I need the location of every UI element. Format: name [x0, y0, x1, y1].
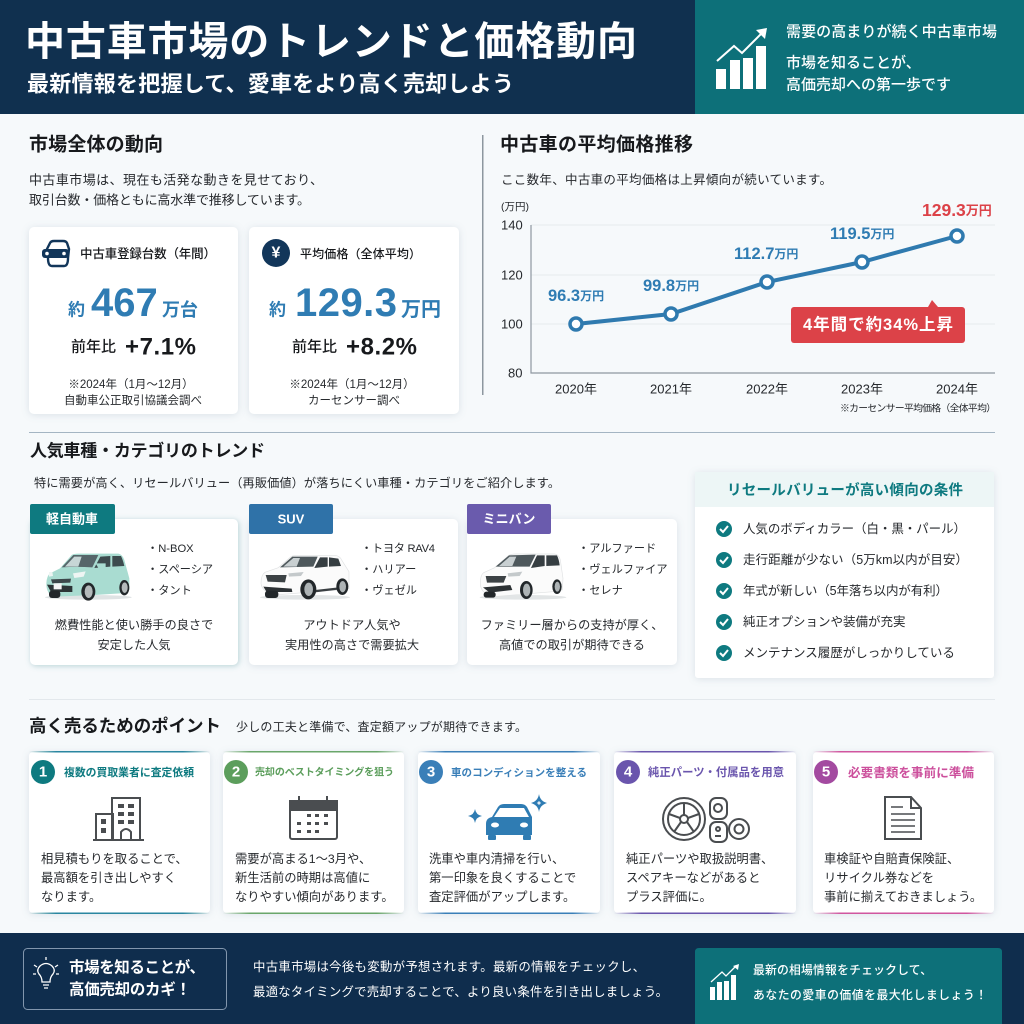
- data labels: 112.7万円: [734, 245, 798, 263]
- point 5 body: [824, 852, 982, 904]
- description: SUV: 実用性の高さで需要拡大: [285, 637, 419, 652]
- tab: SUV: SUV: [278, 512, 305, 526]
- point 5 body: 事前に揃えておきましょう。: [824, 889, 982, 904]
- data labels: 96.3万円: [548, 287, 604, 305]
- description: kei: [55, 617, 213, 652]
- card: average price: 129.3: [295, 281, 397, 325]
- list: SUV models: [361, 542, 435, 597]
- heading: resale conditions: リセールバリューが高い傾向の条件: [727, 481, 963, 499]
- number badge 2: [224, 760, 248, 784]
- point 4 body: プラス評価に。: [626, 890, 712, 904]
- list: minivan models: [578, 543, 668, 597]
- point 3 body: 査定評価がアップします。: [429, 889, 575, 904]
- text: market overview intro: [29, 172, 323, 208]
- number badge 5: [814, 760, 838, 784]
- icon: wheel and parts: [663, 798, 749, 842]
- callout text: 高価売却への第一歩です: [786, 76, 951, 94]
- tab: kei car: 軽自動車: [46, 512, 98, 526]
- footer message: 中古車市場は今後も変動が予想されます。最新の情報をチェックし、: [253, 959, 645, 974]
- list: kei models: [147, 543, 213, 597]
- panel: point 4: [614, 751, 796, 914]
- card: registrations: 自動車公正取引協議会調べ: [64, 393, 202, 407]
- checklist: メンテナンス履歴がしっかりしている: [743, 645, 955, 660]
- panel: minivan: [467, 504, 677, 665]
- number badge 4: 4: [624, 764, 633, 780]
- description: minivan: ファミリー層からの支持が厚く、: [481, 617, 663, 632]
- line chart: [501, 200, 996, 414]
- list: minivan models: ・アルファード: [578, 543, 656, 555]
- card: average price: [249, 227, 459, 414]
- line chart: 2021年: [650, 382, 692, 396]
- checklist: 純正オプションや装備が充実: [743, 614, 906, 629]
- text: popular categories intro: 特に需要が高く、リセールバリュー（再販価値）が落ちにくい車種・カテゴリをご紹介します。: [34, 475, 560, 490]
- text: market overview intro: 中古車市場は、現在も活発な動きを見せており、: [29, 172, 323, 188]
- point 1 body: 相見積もりを取ることで、: [41, 851, 188, 866]
- tab: kei car: [30, 504, 115, 534]
- point 4 body: [626, 851, 773, 904]
- icon: yen coin: [262, 239, 290, 267]
- panel: market overview: [29, 134, 459, 414]
- icon: calendar: [290, 796, 337, 839]
- icon: rising bars: [710, 964, 739, 1000]
- panel: kei car: [30, 504, 238, 665]
- line chart: 2023年: [841, 382, 883, 396]
- data labels: 129.3万円: [922, 200, 992, 220]
- data labels: 119.5万円: [830, 225, 894, 243]
- card: registrations: [29, 227, 238, 414]
- chart source note: ※カーセンサー平均価格（全体平均）: [840, 402, 996, 414]
- callout text: [786, 22, 997, 94]
- description: kei: 燃費性能と使い勝手の良さで: [55, 617, 213, 632]
- card: average price: 約: [269, 300, 286, 320]
- point 3 heading: 車のコンディションを整える: [451, 766, 587, 779]
- card: registrations: 万台: [162, 299, 198, 320]
- footer band: [0, 933, 1024, 1024]
- line chart: 80: [508, 366, 522, 380]
- footer message: 最適なタイミングで売却することで、より良い条件を引き出しましょう。: [253, 984, 668, 999]
- key message box: 市場を知ることが、: [69, 958, 205, 976]
- line chart: 2024年: [936, 382, 978, 396]
- number badge 1: [31, 760, 55, 784]
- key message box: [24, 948, 226, 1010]
- panel: point 2: [223, 751, 404, 914]
- point 3 body: [429, 851, 576, 904]
- number badge 3: 3: [427, 764, 435, 780]
- list: SUV models: ・ハリアー: [361, 564, 416, 576]
- point 2 body: 需要が高まる1～3月や、: [235, 851, 371, 866]
- number badge 3: [419, 760, 443, 784]
- list: kei models: ・スペーシア: [147, 564, 213, 576]
- point 3 body: 洗車や車内清掃を行い、: [429, 851, 564, 866]
- key message box: 高価売却のカギ！: [69, 980, 191, 998]
- data labels: [548, 200, 992, 305]
- point 5 heading: 必要書類を事前に準備: [848, 765, 974, 780]
- description: kei: 安定した人気: [97, 637, 171, 652]
- panel: average price trend: [500, 134, 996, 414]
- point 3 body: 第一印象を良くすることで: [429, 870, 576, 885]
- checklist: 年式が新しい（5年落ち以内が有利）: [743, 583, 948, 598]
- icon: buildings: [93, 798, 144, 840]
- line chart: 140: [501, 218, 523, 232]
- number badge 5: 5: [822, 764, 830, 780]
- number badge 2: 2: [232, 764, 240, 780]
- point 4 body: スペアキーなどがあると: [626, 870, 760, 885]
- card: average price: カーセンサー調べ: [308, 394, 400, 407]
- point 4 body: 純正パーツや取扱説明書、: [626, 851, 773, 866]
- heading: price trend: 中古車の平均価格推移: [500, 134, 693, 156]
- point 1 body: 最高額を引き出しやすく: [41, 871, 176, 885]
- car image: SUV: [260, 555, 350, 600]
- point 2 body: なりやすい傾向があります。: [235, 889, 394, 904]
- checklist: 人気のボディカラー（白・黒・パール）: [743, 521, 966, 536]
- point 5 body: リサイクル券などを: [824, 870, 934, 885]
- icon: light bulb: [33, 957, 59, 988]
- panel: SUV: [249, 504, 458, 665]
- card: registrations: ※2024年（1月～12月）: [68, 377, 194, 391]
- text: market overview intro: 取引台数・価格ともに高水準で推移しています。: [29, 192, 310, 208]
- card: registrations: 467: [91, 281, 158, 325]
- card: average price: +8.2%: [346, 334, 417, 360]
- panel: point 5: [813, 751, 994, 914]
- callout text: 需要の高まりが続く中古車市場: [786, 22, 997, 40]
- list: minivan models: ・ヴェルファイア: [578, 562, 668, 576]
- checklist: 走行距離が少ない（5万km以内が目安）: [743, 552, 968, 567]
- car image: kei: [45, 554, 132, 601]
- card: registrations: 約: [68, 300, 85, 320]
- title: 中古車市場のトレンドと価格動向: [25, 20, 637, 64]
- header teal callout: [695, 0, 1024, 114]
- car image: minivan: [480, 554, 566, 600]
- footer teal callout: 最新の相場情報をチェックして、: [753, 963, 932, 977]
- description: SUV: アウトドア人気や: [303, 617, 401, 632]
- footer message: [253, 959, 668, 999]
- list: minivan models: ・セレナ: [578, 584, 623, 597]
- card: registrations: 中古車登録台数（年間）: [80, 246, 216, 261]
- description: SUV: [285, 617, 419, 652]
- list: kei models: ・タント: [147, 584, 192, 597]
- number badge 1: 1: [39, 764, 47, 780]
- point 2 heading: 売却のベストタイミングを狙う: [255, 766, 394, 778]
- point 1 heading: 複数の買取業者に査定依頼: [64, 765, 194, 779]
- line chart: 120: [501, 268, 523, 282]
- footer teal callout: あなたの愛車の価値を最大化しましょう！: [753, 988, 987, 1002]
- panel: point 3: [418, 751, 600, 914]
- callout text: 市場を知ることが、: [786, 54, 921, 72]
- line chart: 2022年: [746, 382, 788, 396]
- text: price trend intro: ここ数年、中古車の平均価格は上昇傾向が続いています。: [501, 172, 832, 187]
- header banner: [0, 0, 695, 114]
- point 5 body: 車検証や自賠責保険証、: [824, 852, 959, 866]
- line chart: 2020年: [555, 382, 597, 396]
- footer teal callout: [695, 948, 1002, 1024]
- data labels: 99.8万円: [643, 277, 699, 295]
- card: registrations: 前年比: [71, 338, 116, 356]
- card: registrations: +7.1%: [125, 334, 196, 360]
- text: selling points intro: 少しの工夫と準備で、査定額アップが期待できます。: [236, 719, 527, 734]
- icon: car front: [42, 241, 69, 266]
- point 2 body: 新生活前の時期は高値に: [235, 870, 370, 885]
- tab: minivan: [467, 504, 551, 534]
- point 1 body: [41, 851, 188, 904]
- heading: popular categories: 人気車種・カテゴリのトレンド: [30, 440, 265, 460]
- list: SUV models: ・トヨタ RAV4: [361, 542, 435, 555]
- point 1 body: なります。: [41, 890, 101, 904]
- panel: resale value conditions: [695, 472, 994, 678]
- callout: 34% rise: 4年間で約34%上昇: [803, 314, 953, 334]
- icon: document: [885, 797, 921, 839]
- description: minivan: [481, 617, 663, 652]
- heading: selling points: 高く売るためのポイント: [29, 716, 221, 736]
- icon: rising bar chart: [716, 28, 767, 89]
- list: kei models: ・N-BOX: [147, 543, 194, 555]
- tab: SUV: [249, 504, 333, 534]
- card: average price: 前年比: [292, 338, 337, 356]
- icon: shiny car: [468, 794, 547, 840]
- icon: yen coin: ¥: [272, 244, 281, 262]
- tab: minivan: ミニバン: [483, 512, 535, 526]
- description: minivan: 高値での取引が期待できる: [499, 637, 645, 652]
- checklist: [716, 521, 968, 661]
- line chart: (万円): [501, 201, 529, 213]
- card: average price: 万円: [401, 299, 441, 321]
- subtitle: 最新情報を把握して、愛車をより高く売却しよう: [27, 72, 514, 96]
- number badge 4: [616, 760, 640, 784]
- point 2 body: [235, 851, 394, 904]
- line chart: 100: [501, 316, 523, 332]
- panel: point 1: [29, 751, 210, 914]
- list: SUV models: ・ヴェゼル: [361, 583, 417, 597]
- point 4 heading: 純正パーツ・付属品を用意: [648, 765, 784, 779]
- card: average price: ※2024年（1月～12月）: [289, 377, 415, 391]
- card: average price: 平均価格（全体平均）: [300, 246, 421, 261]
- heading: market overview: 市場全体の動向: [29, 134, 163, 156]
- callout: 34% rise: [791, 300, 965, 343]
